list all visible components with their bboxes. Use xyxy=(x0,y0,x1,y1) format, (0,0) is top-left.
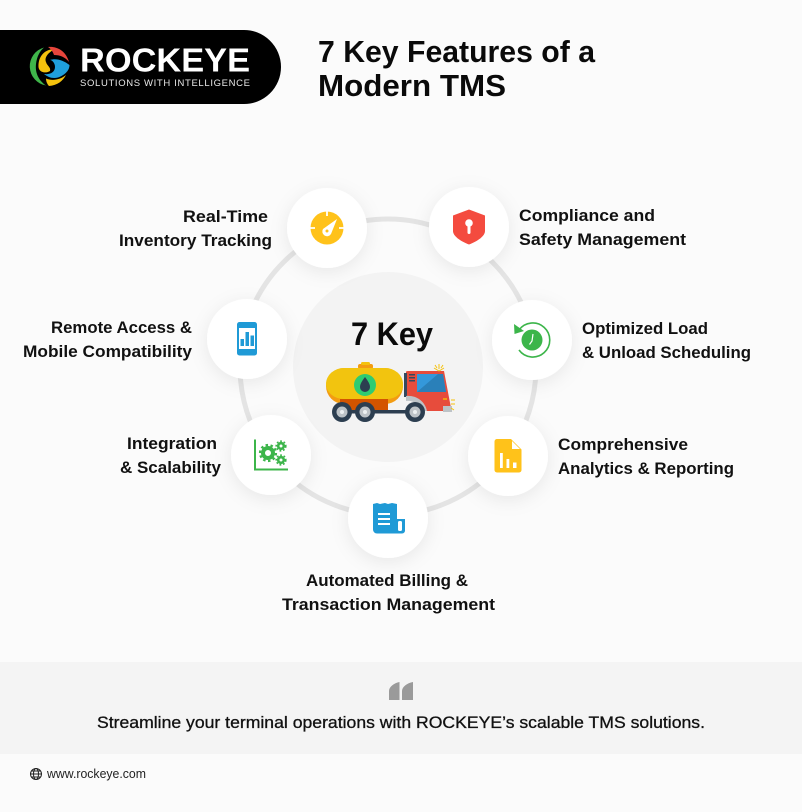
icon: receipt xyxy=(373,503,405,534)
label: Integration xyxy=(127,434,217,453)
feature: automated billing and transaction management xyxy=(282,478,495,614)
label: Transaction Management xyxy=(282,595,495,614)
ring connecting features xyxy=(240,219,536,515)
label: Mobile Compatibility xyxy=(23,342,193,361)
label xyxy=(23,318,193,361)
logo wordmark: ROCKEYE xyxy=(80,42,250,80)
quote text: Streamline your terminal operations with ROCKEYE’s scalable TMS solutions. xyxy=(97,714,705,732)
label: Inventory Tracking xyxy=(119,231,272,250)
icon: clock with back arrow xyxy=(514,323,550,357)
icon: phone with bars xyxy=(237,322,257,356)
feature: real-time inventory tracking xyxy=(119,188,367,268)
icon: tanker truck xyxy=(326,362,455,422)
feature: comprehensive analytics and reporting xyxy=(468,416,734,496)
label xyxy=(519,206,686,249)
label: Remote Access & xyxy=(51,318,192,337)
feature: compliance and safety xyxy=(429,187,686,267)
label: & Unload Scheduling xyxy=(582,343,751,362)
logo tagline: SOLUTIONS WITH INTELLIGENCE xyxy=(80,78,250,89)
icon: shield with keyhole xyxy=(453,210,485,244)
label: Safety Management xyxy=(519,230,686,249)
quote band xyxy=(0,662,802,754)
label: Automated Billing & xyxy=(306,571,468,590)
hub heading: 7 Key xyxy=(351,316,433,352)
icon: quote marks xyxy=(389,682,413,700)
icon: report document xyxy=(494,439,522,472)
label: Analytics & Reporting xyxy=(558,459,734,478)
label: Comprehensive xyxy=(558,435,688,454)
label xyxy=(282,571,495,614)
title: Modern TMS xyxy=(318,68,506,103)
label xyxy=(558,435,734,478)
logo banner xyxy=(0,30,281,104)
label xyxy=(582,319,751,362)
label: Real-Time xyxy=(183,207,268,226)
label xyxy=(119,207,272,250)
label xyxy=(120,434,222,477)
icon: logo swirl xyxy=(30,47,70,86)
label: & Scalability xyxy=(120,458,222,477)
footer website xyxy=(30,766,146,781)
label: Optimized Load xyxy=(582,319,708,338)
feature: remote access and mobile compatibility xyxy=(23,299,287,379)
icon: chart with gears xyxy=(255,440,288,470)
feature: optimized load and unload scheduling xyxy=(492,300,751,380)
title xyxy=(318,34,596,103)
icon: gauge xyxy=(310,212,344,244)
feature: integration and scalability xyxy=(120,415,311,495)
icon: globe xyxy=(30,768,42,780)
title: 7 Key Features of a xyxy=(318,34,596,69)
label: Compliance and xyxy=(519,206,655,225)
website url: www.rockeye.com xyxy=(46,766,146,781)
center hub xyxy=(293,272,483,462)
